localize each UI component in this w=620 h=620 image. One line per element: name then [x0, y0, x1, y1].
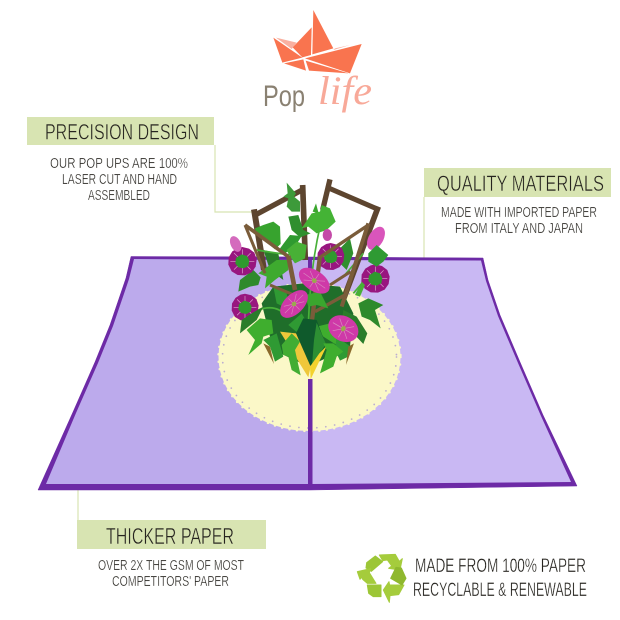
flower pot yellow left	[280, 332, 311, 377]
body text	[50, 156, 188, 204]
front leaves	[240, 292, 351, 362]
body text: ASSEMBLED	[88, 188, 150, 204]
flower pot yellow right	[310, 346, 327, 379]
flower: pink lower left	[275, 285, 313, 323]
card lavender right page	[312, 260, 571, 484]
logo wordmark life: life	[318, 68, 372, 113]
flower: pink back bud	[323, 229, 332, 241]
plant dark backing	[262, 283, 353, 367]
panel: open card	[38, 256, 577, 490]
recycle text	[413, 556, 587, 601]
flower: pale pink left bud	[228, 234, 244, 254]
flower: dark magenta back	[317, 243, 344, 270]
callout: recyclable	[357, 554, 587, 602]
heading text: PRECISION DESIGN	[45, 120, 199, 144]
body text: LASER CUT AND HAND	[62, 172, 177, 188]
back leaves	[238, 183, 383, 344]
logo: Poplife	[263, 10, 372, 113]
body text: COMPETITORS' PAPER	[112, 574, 229, 590]
body text: OUR POP UPS ARE 100%	[50, 156, 188, 172]
flower: dark magenta lower left	[232, 294, 259, 321]
card lavender left page	[46, 259, 308, 484]
card spine	[308, 379, 312, 490]
flower pot interior	[296, 318, 326, 367]
heading banner	[77, 520, 266, 549]
flower: dark magenta right	[361, 264, 390, 293]
middle leaves	[258, 242, 388, 310]
flower: pink centre	[294, 262, 334, 299]
body text	[441, 205, 597, 237]
callout: precision design	[27, 117, 214, 204]
trellis front	[245, 223, 368, 337]
logo wordmark Pop: Pop	[263, 80, 305, 113]
callout leader lines	[78, 145, 424, 520]
brown paper leaves	[263, 343, 354, 365]
icon: recycle arrows	[357, 554, 406, 602]
flower: pink lower right	[323, 310, 363, 347]
body text	[98, 558, 244, 590]
pot inner green panel	[312, 323, 326, 365]
heading text: THICKER PAPER	[106, 523, 234, 549]
stems	[257, 227, 363, 327]
icon: paper boat	[273, 10, 362, 73]
heading banner	[27, 117, 214, 145]
pop-up plant: morning glories on trellis	[228, 179, 390, 379]
heading banner	[424, 168, 611, 197]
callout: thicker paper	[77, 520, 266, 590]
callout: quality materials	[424, 168, 611, 237]
flower: pale pink right bud	[363, 224, 389, 253]
trellis back	[253, 179, 378, 307]
card purple edge	[38, 256, 577, 490]
cream scalloped circle	[218, 283, 400, 431]
flower: dark magenta left	[228, 247, 257, 275]
pot leaves	[282, 333, 343, 375]
body text: OVER 2X THE GSM OF MOST	[98, 558, 244, 574]
body text: FROM ITALY AND JAPAN	[455, 221, 583, 237]
